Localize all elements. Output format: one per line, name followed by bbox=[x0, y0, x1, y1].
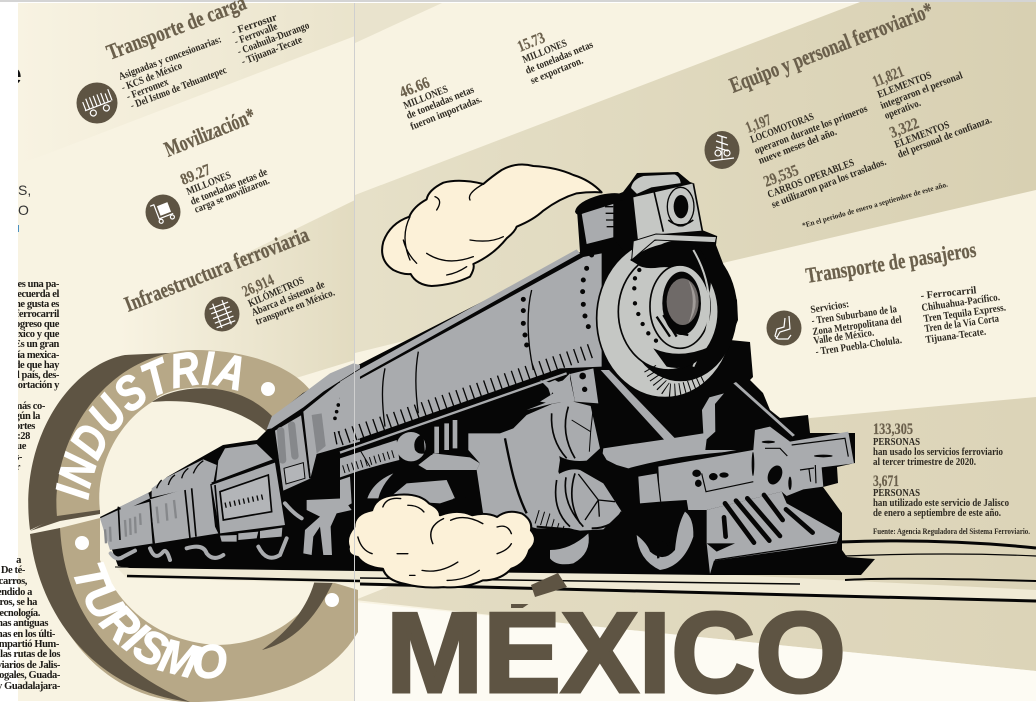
list: servicios: - Ferrocarril bbox=[920, 285, 977, 302]
stat: 133,305 personas bbox=[873, 421, 1003, 468]
list: concesionarias: - Ferrosur bbox=[230, 12, 279, 38]
icon: passenger seat bbox=[766, 310, 802, 346]
icon: locomotive wheel tree bbox=[704, 131, 740, 169]
ring: industria y turismo bbox=[28, 350, 358, 702]
label: INDUSTRIA: INDUSTRIA bbox=[56, 351, 242, 500]
connecting rod and horn bbox=[603, 393, 737, 468]
upper wheel bbox=[547, 401, 600, 461]
title: MÉXICO: MÉXICO bbox=[386, 590, 846, 714]
column text fragments on left edge: , es una pa- bbox=[13, 279, 60, 290]
stat: 26,914 kilómetros: transporte en México. bbox=[254, 287, 337, 328]
stat: 89.27 millones: 89.27 bbox=[178, 161, 213, 189]
panel: infraestructura ferroviaria bbox=[121, 222, 337, 332]
list: concesionarias: - Ferrovalle bbox=[233, 21, 279, 48]
heading: movilización: Movilización* bbox=[161, 102, 259, 162]
stat: 46.66 millones importadas bbox=[397, 74, 484, 133]
icon: hand truck bbox=[146, 194, 180, 230]
stat: 133,305 personas: al tercer trimestre de 2020. bbox=[873, 457, 976, 468]
column text fragments on left edge: l ferrocarril bbox=[11, 309, 59, 320]
main beam bbox=[658, 427, 854, 510]
stat: 3,671 personas: PERSONAS bbox=[873, 488, 920, 499]
gutter line bbox=[354, 3, 355, 701]
stat: 1,197 locomotoras: 1,197 bbox=[743, 112, 774, 137]
list: concesionarias: - Del Istmo de Tehuantepec bbox=[129, 65, 229, 112]
stat: 26,914 kilómetros: KILÓMETROS bbox=[246, 274, 306, 310]
column text fragments on left edge: rogreso que bbox=[11, 319, 60, 330]
smokestack bbox=[575, 193, 627, 244]
column text fragments on left edge: :28 bbox=[17, 431, 30, 442]
column text fragments on left edge: éxico y que bbox=[14, 329, 60, 340]
heading: transporte de pasajeros: Transporte de pasajeros bbox=[804, 237, 978, 288]
strut bbox=[601, 370, 675, 441]
stat: 11,821 elementos: operativo. bbox=[883, 98, 923, 122]
column text fragments on left edge: S, bbox=[18, 182, 31, 198]
cab and firebox bbox=[267, 363, 360, 491]
list: concesionarias: - Tijuana-Tecate bbox=[240, 34, 304, 68]
label: TURISMO: TURISMO bbox=[74, 562, 226, 679]
stat: 29,535 carros: se utilizaron para los traslados. bbox=[770, 157, 888, 211]
stat: 11,821 elementos: ELEMENTOS bbox=[876, 70, 933, 101]
list: concesionarias: - KCS de México bbox=[120, 61, 184, 94]
stat: 26,914 kilómetros: Abarca el sistema de bbox=[250, 279, 327, 319]
column text fragments on left edge: r bbox=[16, 462, 21, 473]
illustration: smoke from chimney bbox=[382, 165, 602, 286]
boiler and smokebox bbox=[340, 173, 737, 453]
stat: 3,322 elementos: 3,322 bbox=[887, 115, 921, 142]
stat: 133,305 personas: han usado los servicios ferroviario bbox=[873, 447, 1003, 458]
list: servicios: Tijuana-Tecate. bbox=[925, 327, 987, 346]
column text fragments on left edge: me gusta es bbox=[12, 299, 59, 310]
icon: freight wagon bbox=[76, 82, 118, 124]
list: servicios: Chihuahua-Pacífico. bbox=[921, 292, 1001, 314]
stat: 46.66 millones importadas: 46.66 bbox=[397, 74, 432, 102]
list: concesionarias: - Coahuila-Durango bbox=[236, 20, 311, 58]
list: concesionarias: Asignadas y concesionarias: bbox=[117, 34, 223, 83]
beam details bbox=[628, 441, 833, 490]
stat: 29,535 carros: CARROS OPERABLES bbox=[766, 158, 856, 201]
stat: 29,535 carros: 29,535 bbox=[761, 162, 801, 191]
column text fragments on left edge: . Es un gran bbox=[10, 339, 60, 350]
column text fragments on left edge: ortes bbox=[15, 421, 35, 432]
stat: 3,671 personas: 3,671 bbox=[873, 473, 899, 490]
stat: 89.27 millones: carga se movilizaron. bbox=[193, 175, 272, 216]
stat: 3,671 personas bbox=[873, 473, 1009, 519]
column text fragments on left edge: recuerda el bbox=[13, 289, 59, 300]
lower wheel bbox=[550, 469, 622, 531]
column text fragments on left edge: e bbox=[5, 58, 22, 91]
stat: 3,671 personas: han utilizado este servicio de Jalisco bbox=[873, 498, 1009, 509]
stat: 26,914 kilómetros bbox=[240, 272, 337, 328]
stat: 89.27 millones bbox=[178, 161, 272, 216]
column text fragments on left edge: ue bbox=[16, 441, 27, 452]
list: servicios: - Tren Suburbano de la bbox=[811, 304, 898, 327]
stat: 26,914 kilómetros: 26,914 bbox=[240, 272, 277, 301]
column text fragments on left edge: s- bbox=[15, 452, 23, 463]
bracket bbox=[570, 368, 598, 403]
column text fragments on left edge: más co- bbox=[14, 401, 46, 412]
stat: 46.66 millones importadas: de toneladas netas bbox=[405, 85, 476, 122]
heading: infraestructura ferroviaria: Infraestructura ferroviaria bbox=[121, 222, 312, 317]
list: servicios: Tren de la Vía Corta bbox=[924, 314, 1000, 335]
column text fragments on left edge: a bbox=[16, 555, 22, 566]
illustration: smoke at wheels bbox=[348, 494, 535, 587]
stat: 46.66 millones importadas: MILLONES bbox=[402, 84, 450, 112]
stat: 15.73 millones exportadas: se exportaron. bbox=[529, 55, 585, 87]
stat: 133,305 personas: 133,305 bbox=[873, 421, 913, 438]
column text fragments on left edge: al país, des- bbox=[12, 370, 60, 381]
stat: 15.73 millones exportadas: 15.73 bbox=[515, 29, 547, 56]
stat: 11,821 elementos bbox=[870, 63, 964, 122]
smokebox front bbox=[597, 239, 737, 398]
front wheels bbox=[637, 512, 693, 570]
boiler rear gear bbox=[340, 373, 582, 530]
list: servicios: - Tren Puebla-Cholula. bbox=[815, 335, 903, 358]
stat: 3,322 elementos: ELEMENTOS bbox=[893, 120, 951, 151]
stat: 133,305 personas: PERSONAS bbox=[873, 437, 920, 448]
column text fragments on left edge: De té- bbox=[1, 565, 26, 576]
column text fragments on left edge: portación y bbox=[12, 380, 60, 391]
stat: 3,322 elementos: del personal de confianza. bbox=[896, 115, 994, 161]
headlight bbox=[613, 173, 717, 260]
illustration: locomotive bbox=[100, 172, 875, 575]
stat: 11,821 elementos: 11,821 bbox=[870, 63, 906, 91]
stat: 15.73 millones exportadas: de toneladas netas bbox=[524, 40, 595, 77]
rear passenger cars bbox=[100, 363, 360, 560]
list: concesionarias bbox=[117, 12, 311, 112]
stat: 89.27 millones: de toneladas netas de bbox=[189, 167, 269, 208]
list: servicios: Zona Metropolitana del bbox=[812, 315, 903, 338]
stat: 11,821 elementos: integraron el personal bbox=[879, 70, 964, 112]
list: concesionarias: - Ferromex bbox=[125, 77, 171, 103]
list: servicios: Servicios: bbox=[810, 299, 850, 316]
stat: 46.66 millones importadas: fueron importadas. bbox=[409, 94, 484, 133]
panel: transporte de pasajeros bbox=[766, 237, 1007, 358]
stat: 89.27 millones: MILLONES bbox=[185, 170, 233, 198]
panel: movilización bbox=[146, 102, 272, 230]
icon: rail track bbox=[204, 296, 240, 332]
locomotive silhouette bbox=[100, 172, 875, 575]
stat: 3,671 personas: de enero a septiembre de este año. bbox=[873, 508, 1001, 519]
footnote: *En el periodo de enero a septiembre de este año. bbox=[801, 180, 949, 230]
list: servicios: Valle de México. bbox=[813, 328, 875, 347]
list: servicios bbox=[810, 285, 1007, 358]
illustration: tracks bbox=[115, 541, 1036, 601]
column text fragments on left edge: nía mexica- bbox=[12, 350, 60, 361]
rear undercarriage bbox=[111, 503, 302, 560]
stat: 15.73 millones exportadas bbox=[515, 29, 595, 87]
stat: 1,197 locomotoras: LOCOMOTORAS bbox=[749, 111, 816, 146]
column text fragments on left edge: O bbox=[18, 202, 29, 218]
column text fragments on left edge: gún la bbox=[15, 411, 41, 422]
front running gear bbox=[540, 368, 854, 574]
stat: 1,197 locomotoras: nueve meses del año. bbox=[757, 127, 839, 167]
list: servicios: Tren Tequila Express. bbox=[923, 302, 1007, 325]
column text fragments on left edge: de que hay bbox=[15, 360, 60, 371]
panel: transporte de carga bbox=[76, 0, 311, 123]
stat: 1,197 locomotoras bbox=[743, 104, 869, 167]
stat: 1,197 locomotoras: operaron durante los primeros bbox=[753, 104, 869, 157]
column text fragments on left edge bbox=[0, 58, 61, 692]
panel: estadísticas de pasajeros bbox=[873, 421, 1030, 536]
stat: 15.73 millones exportadas: MILLONES bbox=[521, 38, 569, 66]
panel: equipo y personal ferroviario bbox=[704, 0, 994, 230]
cowcatcher bbox=[707, 492, 840, 574]
